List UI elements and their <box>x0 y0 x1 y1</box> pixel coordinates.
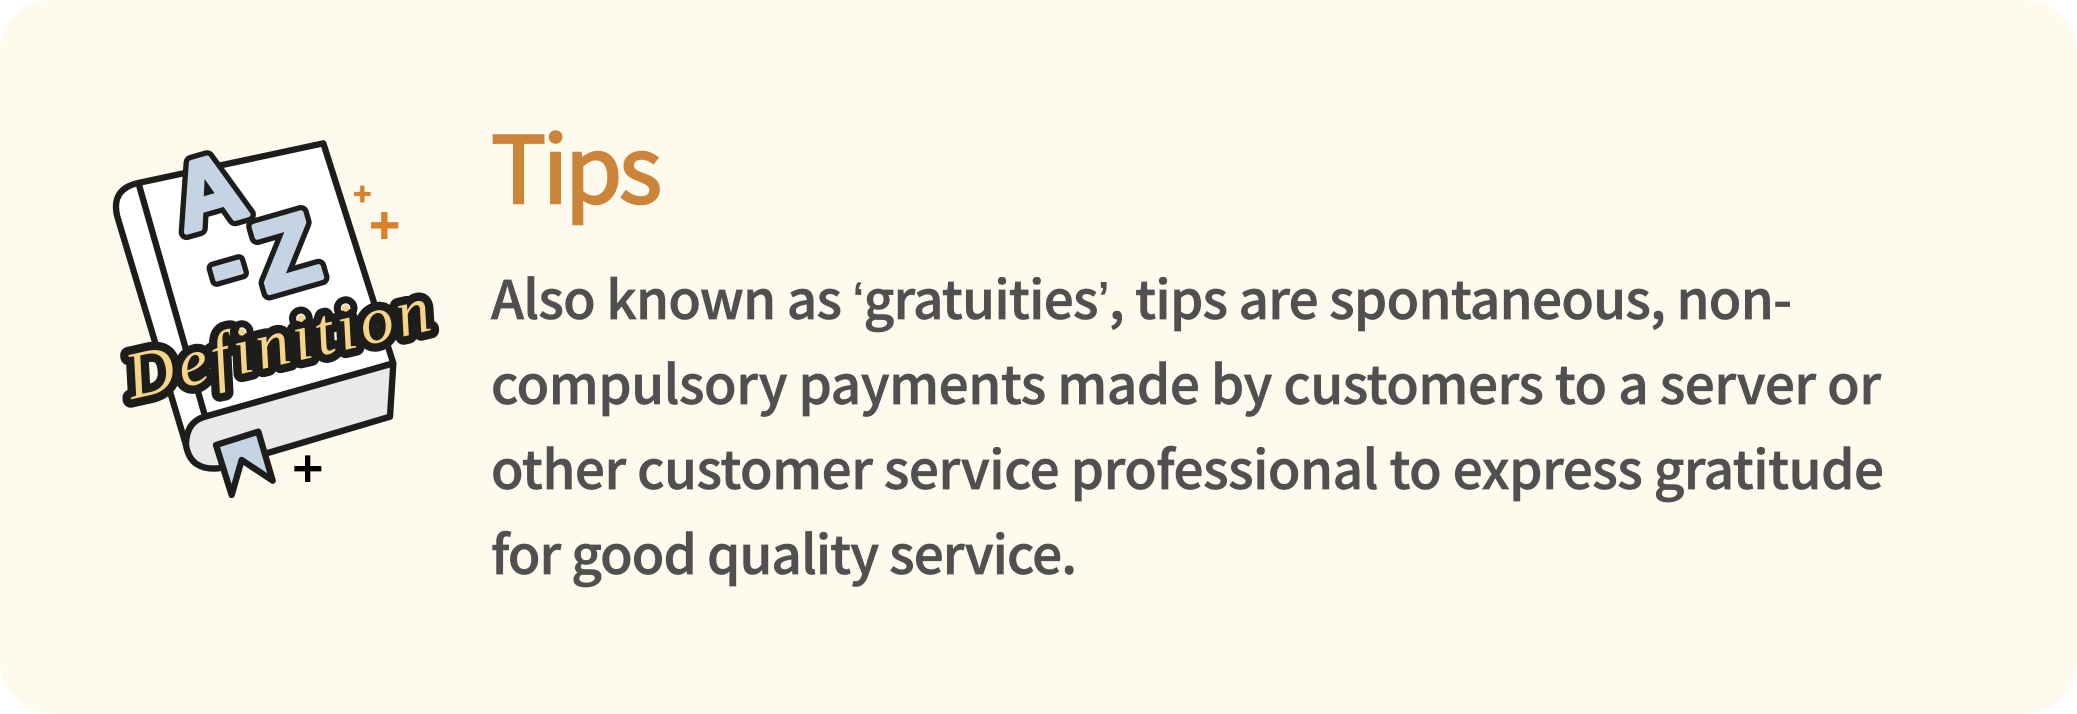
black plus <box>294 455 321 482</box>
orange small plus <box>354 186 371 202</box>
bookmark <box>216 432 273 495</box>
letter Z: Z <box>242 191 330 313</box>
letter A: A <box>161 132 256 253</box>
body line 2: compulsory payments made by customers to a server or <box>491 344 1881 420</box>
letter A: A <box>161 132 256 253</box>
book spine line <box>139 185 205 416</box>
orange large plus <box>371 212 398 239</box>
book pages <box>186 363 393 469</box>
text block: definition body <box>491 259 1884 590</box>
script word Definition: Definition <box>118 273 437 414</box>
body line 4: for good quality service. <box>491 514 1077 590</box>
heading: Tips: Tips <box>491 97 662 230</box>
icon: A-Z definition book <box>116 132 437 495</box>
dash: - <box>193 201 258 324</box>
book cover <box>116 143 393 445</box>
body line 3: other customer service professional to express gratitude <box>491 429 1884 505</box>
body line 1: Also known as ‘gratuities’, tips are spontaneous, non- <box>491 259 1792 335</box>
letter Z: Z <box>242 191 330 313</box>
dash: - <box>193 201 258 324</box>
